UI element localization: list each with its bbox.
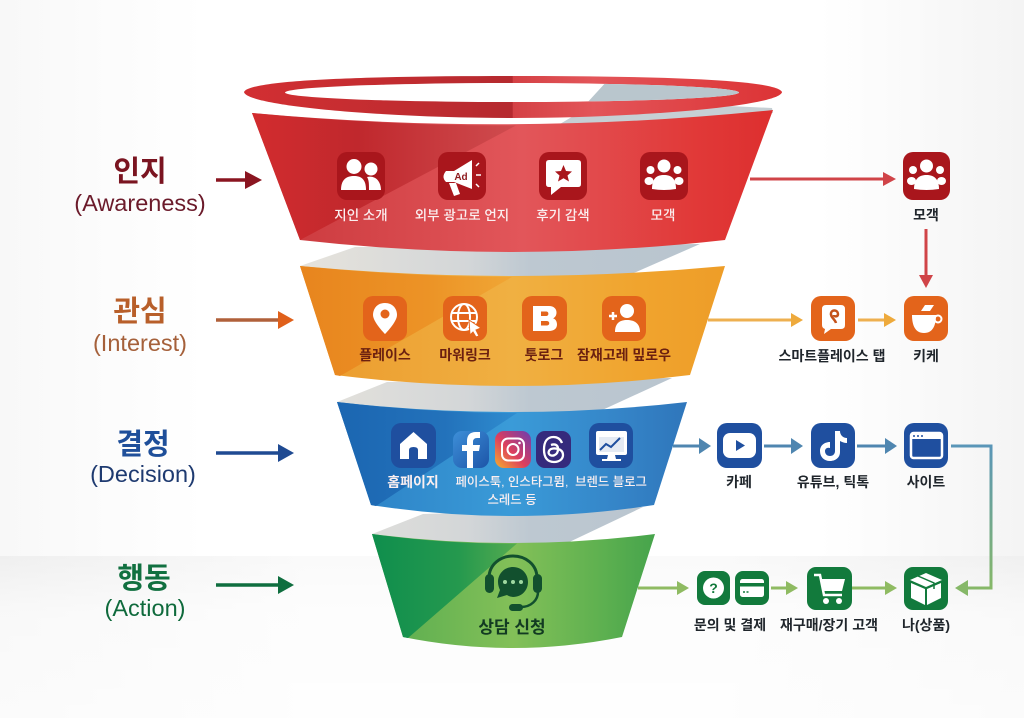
- heading: decision: (Decision): [90, 461, 196, 487]
- label: site: 사이트: [907, 474, 945, 490]
- label: social channels: 페이스툭, 인스타그뮘,: [456, 475, 568, 489]
- label: youtube tiktok: 유튜브, 틱톡: [797, 474, 869, 490]
- connector shadow: orange to blue: [337, 378, 672, 412]
- label: homepage: 홈페이지: [387, 474, 439, 490]
- arrow: payment to repurchase: [771, 581, 798, 595]
- icon: monitor chart: [589, 423, 633, 468]
- label: customer acquisition right: 모객: [913, 207, 939, 223]
- icon: home: [391, 423, 436, 468]
- heading: action: [105, 563, 185, 621]
- icon: globe cursor: [443, 296, 487, 341]
- arrow: action into funnel: [216, 576, 294, 594]
- label: smartplace tab: 스마트플레이스 탭: [779, 348, 885, 364]
- label: customer acquisition: 모객: [651, 208, 675, 223]
- heading: decision: [90, 428, 196, 487]
- arrow: decision to cafe: [673, 438, 711, 454]
- icon: threads: [536, 431, 571, 468]
- icon: shopping cart: [807, 567, 852, 610]
- arrow: interest into funnel: [216, 311, 294, 329]
- label: threads etc: 스레드 등: [487, 493, 537, 507]
- icon: question: [697, 571, 730, 605]
- heading: interest: [93, 295, 187, 356]
- icon: megaphone ad: [438, 152, 486, 200]
- icon: browser window: [904, 423, 948, 468]
- connector shadow: red to orange: [300, 244, 700, 276]
- panel: awareness funnel band: [252, 110, 773, 252]
- panel: interest funnel band: [300, 266, 725, 386]
- icon: customer group: [640, 152, 688, 200]
- funnel rim: [244, 76, 782, 127]
- icon: megaphone ad: Ad: [454, 172, 468, 183]
- icon: credit card: [735, 571, 769, 605]
- label: prospect follow: 잠재고레 밒로우: [577, 347, 671, 363]
- label: cafe: 카페: [726, 474, 752, 490]
- panel: action funnel band: [372, 534, 655, 648]
- icon: instagram: [495, 431, 531, 468]
- icon: headset chat: [485, 556, 542, 611]
- icon: blog B: [522, 296, 567, 341]
- heading: awareness: 인지: [113, 155, 167, 188]
- icon: review star bubble: [539, 152, 587, 200]
- arrow: youtube to site: [857, 438, 897, 454]
- arrow: decision into funnel: [216, 444, 294, 462]
- heading: awareness: (Awareness): [74, 190, 206, 216]
- arrow: awareness into funnel: [216, 171, 262, 189]
- icon: tiktok note: [811, 423, 855, 468]
- icon: facebook: [453, 431, 489, 468]
- heading: action: 행동: [117, 563, 171, 595]
- label: inquiry and payment: 문의 및 결제: [694, 617, 766, 633]
- label: kicke: 키케: [913, 348, 939, 364]
- label: my link: 마워링크: [439, 347, 491, 363]
- panel: decision funnel band: [337, 402, 687, 516]
- icon: location pin: [363, 296, 407, 341]
- icon: smartplace talk: [811, 296, 855, 341]
- connector shadow: blue to green: [372, 507, 643, 545]
- icon: add follower: [602, 296, 646, 341]
- arrow: site to product: [951, 446, 991, 596]
- icon: video play: [717, 423, 762, 468]
- label: external ad exposure: 외부 광고로 언지: [415, 208, 509, 223]
- icon: acquaintance referral: [337, 152, 385, 200]
- label: brand blog: 브렌드 블로그: [575, 475, 647, 489]
- heading: awareness: [74, 155, 206, 216]
- heading: action: (Action): [105, 595, 185, 621]
- label: me product: 나(상품): [902, 617, 950, 633]
- label: place: 플레이스: [359, 347, 411, 363]
- heading: interest: (Interest): [93, 330, 187, 356]
- heading: decision: 결정: [116, 428, 170, 461]
- label: blog: 툿로그: [525, 347, 563, 363]
- arrow: interest to smartplace: [708, 313, 803, 327]
- icon: product box: [904, 567, 948, 610]
- arrow: repurchase to product: [852, 581, 897, 595]
- arrow: cafe to youtube: [764, 438, 803, 454]
- label: repurchase customer: 재구매/장기 고객: [780, 617, 878, 633]
- arrow: awareness to customers: [750, 172, 896, 186]
- arrow: action to inquiry: [638, 581, 689, 595]
- arrow: smartplace to cafe icon: [858, 313, 896, 327]
- arrow: customers to cafe icon: [919, 229, 933, 288]
- heading: interest: 관심: [113, 295, 167, 328]
- icon: question: ?: [709, 580, 718, 596]
- label: acquaintance referral: 지인 소개: [334, 208, 388, 223]
- icon: customer group right: [903, 152, 950, 200]
- icon: coffee cup: [904, 296, 948, 341]
- label: consultation request: 상담 신청: [478, 618, 546, 637]
- label: review search: 후기 감색: [536, 208, 590, 223]
